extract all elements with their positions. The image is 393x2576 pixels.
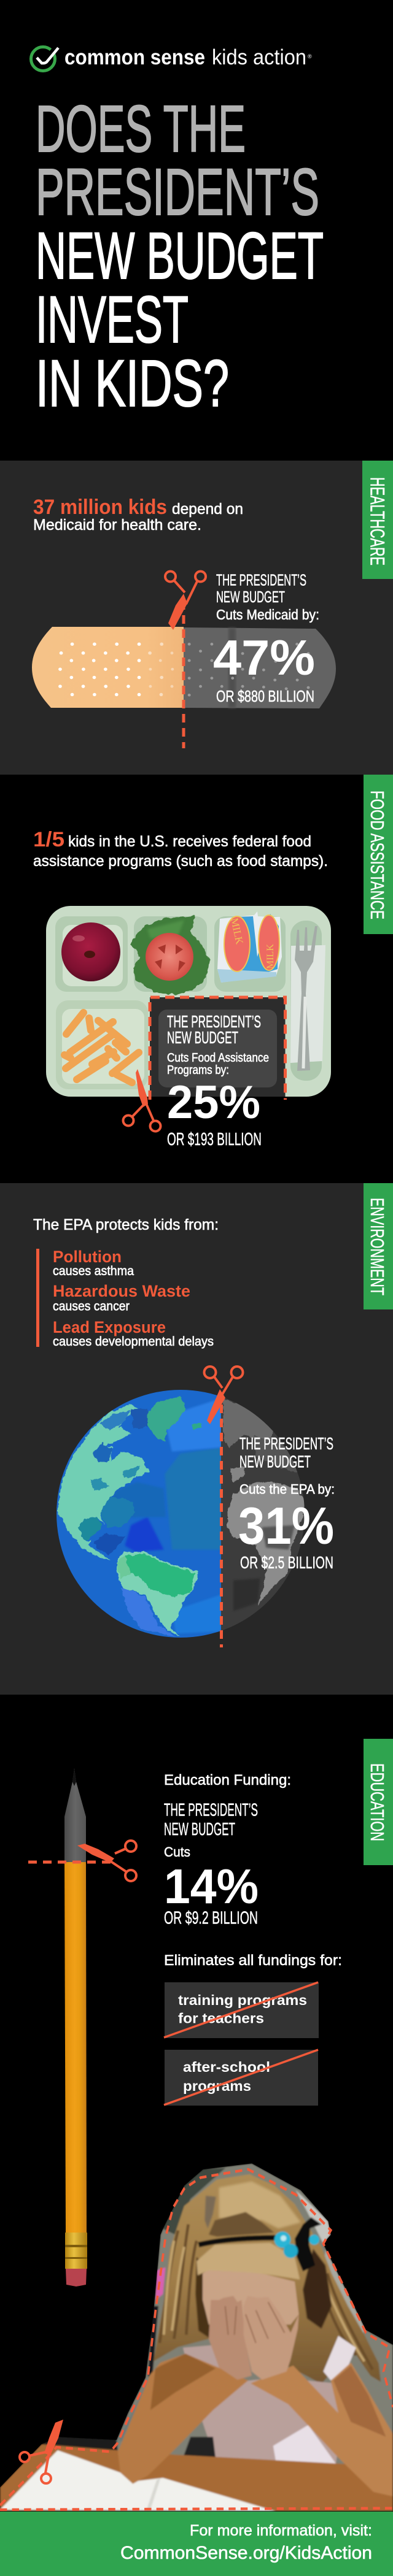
- food budget cut text: NEW BUDGET: [167, 1028, 238, 1047]
- healthcare budget cut text: OR $880 BILLION: [216, 687, 314, 705]
- icon: green check ring: [31, 47, 58, 71]
- title: [36, 91, 324, 420]
- panel: education: [0, 1695, 393, 2512]
- logo wordmark: kids action: [212, 45, 306, 69]
- footer: [0, 2512, 393, 2576]
- panel: food assistance: [0, 775, 393, 1183]
- apple: [61, 922, 120, 981]
- title: IN KIDS?: [36, 346, 229, 420]
- EPA list: causes asthma: [53, 1264, 134, 1278]
- arms: [118, 2353, 393, 2496]
- icon: scissors: [165, 572, 206, 630]
- food budget cut text: Cuts Food Assistance: [167, 1051, 269, 1065]
- food statement: [33, 828, 328, 870]
- footer: For more information, visit:: [190, 2522, 372, 2539]
- EPA list: causes cancer: [53, 1299, 130, 1314]
- education budget cut text: Eliminates all fundings for:: [164, 1952, 342, 1969]
- photo: crying girl at desk: [0, 2163, 393, 2511]
- education budget cut text: NEW BUDGET: [164, 1820, 235, 1839]
- education budget cut text: Cuts: [164, 1844, 190, 1860]
- healthcare budget cut text: 47%: [213, 631, 315, 686]
- education budget cut text: 14%: [164, 1859, 259, 1914]
- pencil cut line: [28, 1861, 111, 1863]
- globe grey half: [221, 1398, 305, 1630]
- globe colored half: [56, 1390, 221, 1638]
- environment budget cut text: 31%: [238, 1497, 334, 1555]
- crossed-out box: after-school programs: after-school: [183, 2059, 270, 2075]
- milk carton: [217, 911, 282, 983]
- icon: scissors: [123, 1069, 161, 1131]
- healthcare statement: 37 million kids: [33, 496, 167, 519]
- milk carton: MILK: [228, 917, 246, 946]
- tab: environment: ENVIRONMENT: [367, 1198, 388, 1295]
- crossed-out box: training programs: [164, 1982, 319, 2038]
- logo wordmark: common sense: [64, 45, 205, 69]
- healthcare statement: depend on: [172, 500, 243, 518]
- icon: scissors: [20, 2420, 63, 2483]
- title: INVEST: [36, 282, 189, 356]
- crossed-out box: training programs: for teachers: [178, 2011, 264, 2026]
- education budget cut text: OR $9.2 BILLION: [164, 1909, 258, 1928]
- crossed-out box: after-school programs: [164, 2050, 318, 2106]
- food statement: 1/5: [33, 828, 64, 851]
- desk and notebook: [0, 2444, 393, 2511]
- lettuce and tomato: [131, 915, 210, 995]
- healthcare budget cut text: NEW BUDGET: [216, 588, 285, 606]
- milk carton: MILK: [265, 944, 276, 969]
- EPA list: Lead Exposure: [53, 1318, 166, 1336]
- napkin and fork: [290, 926, 325, 1071]
- pencil: [64, 1768, 87, 2287]
- hair accessory: [198, 2217, 321, 2271]
- environment budget cut text: THE PRESIDENT’S: [239, 1434, 333, 1453]
- tab: education: EDUCATION: [367, 1763, 388, 1841]
- education budget cut text: [164, 1772, 342, 1969]
- lunch tray: [46, 906, 331, 1100]
- environment budget cut text: [238, 1434, 335, 1572]
- EPA list: Hazardous Waste: [53, 1282, 190, 1300]
- crossed-out box: training programs: training programs: [178, 1992, 307, 2008]
- logo wordmark: ®: [308, 53, 312, 59]
- environment cut line: [220, 1405, 223, 1647]
- EPA list: Pollution: [53, 1248, 122, 1266]
- healthcare budget cut text: THE PRESIDENT’S: [216, 570, 306, 589]
- tab: education: [364, 1739, 393, 1865]
- food statement: assistance programs (such as food stamps).: [33, 853, 328, 870]
- tab: healthcare: HEALTHCARE: [366, 477, 388, 565]
- bandage perforations: [58, 643, 309, 697]
- hands: [209, 2296, 299, 2380]
- food budget cut text: [167, 1012, 269, 1149]
- title: DOES THE: [36, 91, 246, 166]
- tab: food assistance: FOOD ASSISTANCE: [367, 791, 388, 919]
- food budget cut text: 25%: [167, 1076, 260, 1129]
- food budget cut text: OR $193 BILLION: [167, 1130, 262, 1149]
- dress and sleeves: [183, 2336, 356, 2464]
- EPA list: [36, 1248, 214, 1349]
- tray compartments: [55, 916, 322, 1089]
- tab: healthcare: [362, 461, 393, 579]
- healthcare statement: [33, 496, 243, 534]
- tab: food assistance: [364, 775, 393, 934]
- logo wordmark: [64, 45, 312, 69]
- panel: environment: [0, 1183, 393, 1695]
- bandage: [32, 627, 336, 708]
- footer: CommonSense.org/KidsAction: [120, 2543, 372, 2563]
- environment budget cut text: NEW BUDGET: [239, 1452, 311, 1471]
- environment budget cut text: Cuts the EPA by:: [239, 1482, 335, 1497]
- icon: scissors: [204, 1367, 243, 1424]
- hair and head: [154, 2174, 381, 2384]
- healthcare cut line: [182, 601, 185, 748]
- food budget cut text: Programs by:: [167, 1064, 229, 1077]
- EPA list: causes developmental delays: [53, 1335, 214, 1349]
- tab: environment: [364, 1183, 393, 1309]
- globe: [56, 1390, 305, 1638]
- food statement: kids in the U.S. receives federal food: [68, 833, 311, 850]
- panel: healthcare: [0, 461, 393, 775]
- logo: common sense kids action: [31, 45, 312, 71]
- photo backdrop: [41, 2163, 393, 2465]
- fries: [64, 1013, 139, 1083]
- icon: scissors: [77, 1841, 136, 1881]
- environment budget cut text: OR $2.5 BILLION: [240, 1553, 333, 1572]
- dashed cut outline: [0, 2169, 393, 2510]
- healthcare budget cut text: [213, 570, 319, 705]
- education budget cut text: Education Funding:: [164, 1772, 291, 1788]
- crossed-out box: after-school programs: programs: [183, 2078, 251, 2094]
- food budget cut text: THE PRESIDENT’S: [167, 1012, 261, 1031]
- education budget cut text: THE PRESIDENT’S: [164, 1801, 258, 1820]
- healthcare budget cut text: Cuts Medicaid by:: [216, 607, 319, 623]
- EPA heading: The EPA protects kids from:: [33, 1216, 219, 1233]
- tray cut-out: [150, 997, 286, 1100]
- healthcare statement: Medicaid for health care.: [33, 516, 201, 534]
